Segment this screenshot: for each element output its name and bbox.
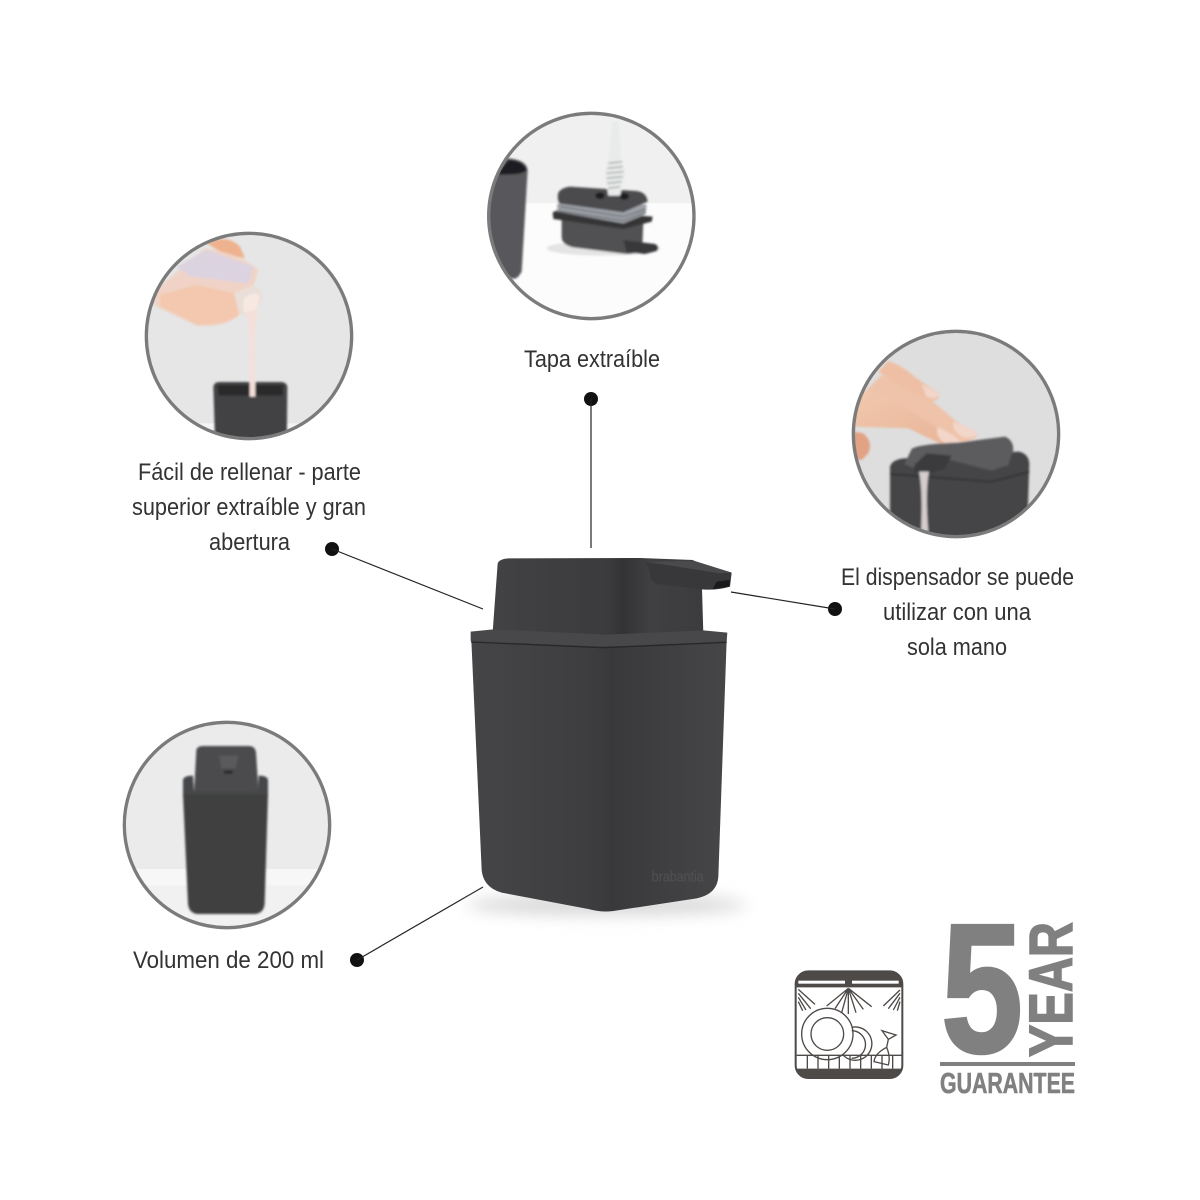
main product: soap dispenser bbox=[467, 558, 747, 915]
numeral 5: 5 bbox=[941, 885, 1023, 1091]
dispenser cap bbox=[493, 558, 703, 637]
label: one-hand use: utilizar con una bbox=[883, 599, 1032, 626]
dispenser body bbox=[471, 640, 727, 912]
label: easy to refill: abertura bbox=[209, 529, 291, 556]
word GUARANTEE: GUARANTEE bbox=[940, 1068, 1075, 1100]
label: one-hand use bbox=[841, 564, 1074, 661]
label: easy to refill bbox=[132, 459, 366, 556]
panel: removable lid photo circle bbox=[487, 112, 696, 320]
pointer: one-hand use bbox=[731, 592, 842, 616]
label: easy to refill: superior extraíble y gran bbox=[132, 494, 366, 521]
label: volume: Volumen de 200 ml bbox=[133, 947, 324, 974]
nozzle top highlight bbox=[647, 561, 731, 573]
panel: 200 ml volume photo circle bbox=[122, 720, 332, 930]
panel: one-hand use photo circle bbox=[845, 325, 1065, 545]
pointer: volume bbox=[350, 887, 483, 967]
icon: dishwasher safe bbox=[796, 971, 902, 1078]
label: removable lid: Tapa extraíble bbox=[524, 346, 660, 373]
pointer: easy to refill bbox=[325, 542, 483, 609]
label: one-hand use: sola mano bbox=[907, 634, 1007, 661]
word YEAR: YEAR bbox=[1017, 922, 1085, 1057]
nozzle opening bbox=[713, 580, 730, 589]
label: one-hand use: El dispensador se puede bbox=[841, 564, 1074, 591]
dispenser nozzle bbox=[646, 561, 732, 590]
panel: refill photo circle bbox=[140, 230, 360, 450]
label: easy to refill: Fácil de rellenar - parte bbox=[138, 459, 361, 486]
pointer: removable lid bbox=[584, 392, 598, 548]
brand mark: brabantia bbox=[652, 870, 704, 886]
infographic: soap dispenser features bbox=[122, 112, 1075, 1094]
lid shadow line bbox=[471, 642, 727, 648]
badge: 5 year guarantee bbox=[940, 885, 1085, 1100]
dispenser lid rim bbox=[471, 629, 727, 647]
